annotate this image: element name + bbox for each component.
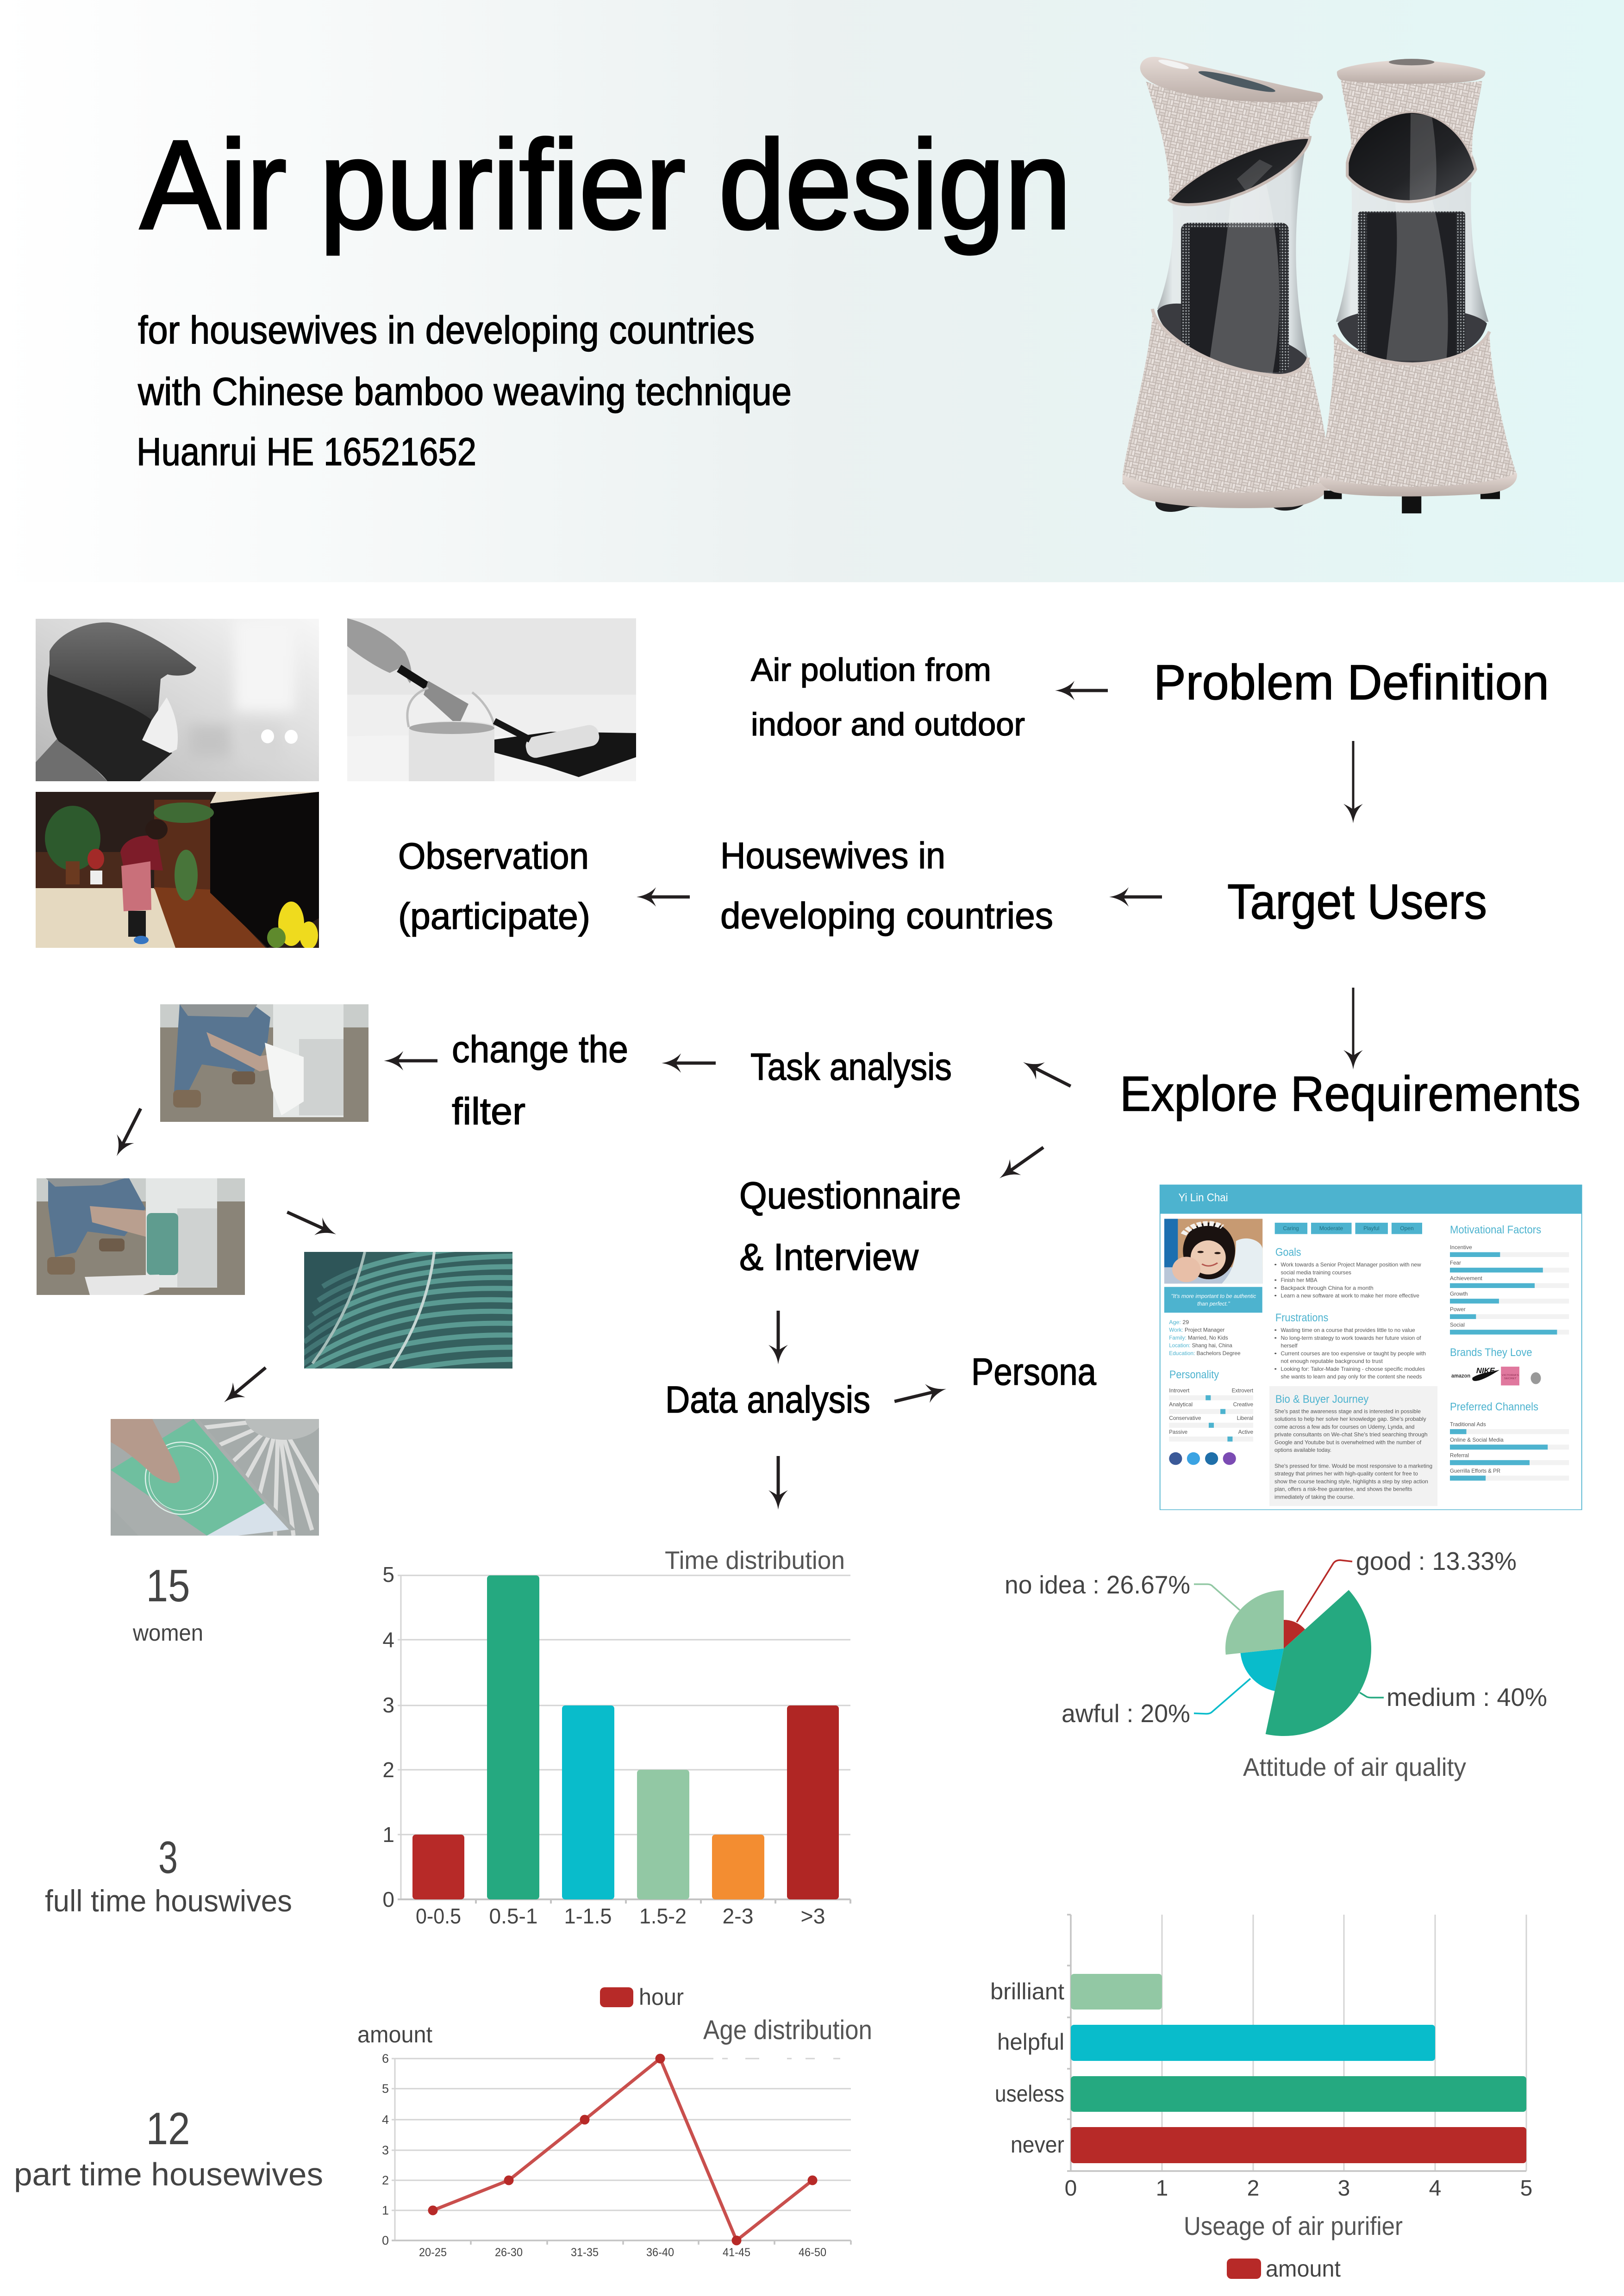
y axis labels: 0 [382,2234,389,2247]
chart title: Time distribution [665,1546,845,1574]
line chart: age distribution [357,1984,872,2259]
sector labels: medium : 40% [1387,1683,1547,1711]
x axis labels [416,1904,825,1928]
persona motivational factors [1450,1223,1569,1335]
y axis labels: 6 [382,2052,389,2066]
persona quote: than perfect." [1197,1300,1230,1307]
process text: target users: Target Users [1227,874,1487,929]
chart title: Useage of air purifier [1184,2211,1403,2240]
x axis labels: >3 [801,1904,825,1928]
value axis labels: 5 [1520,2176,1532,2201]
persona frustrations: Frustrations [1275,1312,1328,1324]
persona goals: • [1274,1285,1277,1291]
y axis labels: 3 [382,1693,394,1717]
persona personality sliders: Analytical [1169,1401,1193,1408]
arrow: housewives to observation [637,887,690,907]
persona trait tags: Open [1400,1226,1414,1232]
value axis labels: 4 [1429,2176,1441,2201]
persona bio panel: Bio & Buyer Journey [1275,1393,1369,1405]
persona demographics: Age: 29 [1169,1319,1189,1325]
persona demographics [1169,1319,1241,1356]
process text: air pollution: Air polution from [751,652,991,688]
arrow: problem to target users [1343,741,1363,823]
persona frustrations: she wants to learn and pay only for the content she needs [1281,1374,1422,1380]
persona goals: • [1274,1277,1277,1283]
y axis labels: 2 [382,1758,394,1782]
persona bio panel: strategy that primes her with high-quality content for free to [1274,1471,1418,1477]
persona frustrations: • [1274,1366,1277,1372]
photo: painting with brush and can [347,618,636,781]
left purifier [1123,57,1332,512]
horizontal bar chart: usage of air purifier [990,1915,1532,2282]
persona personality sliders [1169,1368,1253,1442]
x axis labels: 0-0.5 [416,1904,461,1928]
persona bio panel: She's past the awareness stage and is interested in possible [1274,1408,1421,1415]
persona brands: Brands They Love [1450,1346,1532,1358]
photo: filter close-up [276,1245,522,1423]
y axis labels: 5 [382,2082,389,2096]
subtitle text block [137,308,792,473]
value axis labels [1065,2176,1532,2201]
x axis labels: 1-1.5 [564,1904,612,1928]
process text: task analysis: Task analysis [750,1046,952,1088]
persona motivational factors: Social [1450,1322,1465,1328]
persona brands [1450,1346,1541,1385]
x axis labels: 2-3 [722,1904,754,1928]
process text: data analysis: Data analysis [665,1379,870,1421]
persona personality sliders: Personality [1169,1368,1219,1381]
persona bio panel: Google and Youtube but is overwhelmed with the number of [1274,1439,1421,1446]
arrow: photo step 2 to 3 [283,1203,340,1243]
persona frustrations: • [1274,1350,1277,1357]
persona goals: Backpack through China for a month [1281,1285,1374,1291]
x axis labels: 26-30 [495,2246,523,2259]
x axis labels: 46-50 [799,2246,826,2259]
arrow: photo step 3 to 4 [218,1360,272,1410]
persona trait tags: Playful [1363,1226,1380,1232]
rose chart: attitude of air quality [1005,1547,1547,1781]
persona motivational factors: Achievement [1450,1276,1482,1282]
stat: 3 full time housewives: 3 [158,1832,178,1883]
persona quote: "It's more important to be authentic [1171,1293,1256,1300]
photo: woman cleaning at home [36,792,319,949]
persona goals: Goals [1275,1246,1301,1258]
process text: observation: Observation [398,835,589,877]
y axis labels: 1 [382,2203,389,2217]
arrow: questionnaire to data analysis [768,1311,788,1364]
sector labels: awful : 20% [1062,1699,1190,1728]
persona frustrations: Wasting time on a course that provides little to no value [1281,1327,1415,1333]
persona photo [1164,1219,1262,1284]
persona frustrations: not enough reputable background to trust [1281,1358,1383,1364]
process text: housewives [720,835,1053,936]
y axis labels: 5 [382,1562,394,1587]
process text: questionnaire and interview: Questionnaire [739,1175,961,1217]
arrow: target users to explore requirements [1343,988,1363,1070]
stat: 15 women [132,1560,203,1646]
persona motivational factors: Fear [1450,1260,1461,1266]
persona personality sliders: Passive [1169,1429,1187,1435]
persona brands: SECRET [1504,1377,1517,1380]
value axis labels: 2 [1247,2176,1259,2201]
hero banner [0,0,1624,582]
persona goals: Work towards a Senior Project Manager position with new [1281,1262,1421,1268]
photo: opening purifier panel [160,1004,369,1122]
persona preferred channels: Guerrilla Efforts & PR [1450,1468,1500,1474]
persona goals [1274,1246,1421,1299]
x axis labels [419,2246,826,2259]
persona bio panel: options available today. [1274,1447,1331,1453]
persona personality sliders: Active [1238,1429,1253,1435]
persona bio panel: immediately of taking the course. [1274,1494,1355,1500]
photo: person in hood wearing mask [36,619,319,781]
leader lines [1194,1560,1384,1714]
photo: phone app over purifier [111,1394,324,1536]
x axis labels: 36-40 [646,2246,674,2259]
category labels: brilliant [990,1979,1064,2004]
persona motivational factors: Power [1450,1307,1466,1313]
process text: questionnaire and interview: & Interview [739,1236,919,1278]
persona preferred channels: Preferred Channels [1450,1400,1538,1412]
category labels: never [1011,2132,1064,2158]
persona goals: • [1274,1293,1277,1299]
persona bio panel: come across a few ads for courses on Udemy, Lynda, and [1274,1424,1414,1430]
stat: 3 full time housewives: full time houswives [45,1884,292,1918]
stat: 12 part time housewives: 12 [146,2103,190,2154]
persona bio panel [1269,1386,1437,1506]
stat: 15 women: women [132,1620,203,1646]
value axis labels: 1 [1156,2176,1168,2201]
chart title: Age distribution [703,2015,872,2045]
sector labels [1005,1547,1547,1728]
arrow: data analysis to charts [768,1456,788,1510]
persona demographics: Family: Married, No Kids [1169,1335,1228,1341]
stat: 12 part time housewives: part time housewives [14,2156,323,2192]
process text: observation [398,835,590,937]
bar chart: time distribution [382,1546,850,1928]
persona brands: VICTORIA'S [1502,1374,1519,1377]
value axis labels: 0 [1065,2176,1077,2201]
legend: amount [1266,2256,1341,2282]
persona frustrations: • [1274,1327,1277,1333]
right purifier [1319,59,1517,513]
persona goals: Finish her MBA [1281,1277,1318,1283]
x axis labels: 31-35 [571,2246,599,2259]
subtitle text block: Huanrui HE 16521652 [137,430,476,473]
subtitle text block: for housewives in developing countries [138,308,755,352]
persona motivational factors: Motivational Factors [1450,1223,1541,1236]
process text: observation: (participate) [398,896,590,937]
persona demographics: Location: Shang hai, China [1169,1343,1232,1349]
persona demographics: Education: Bachelors Degree [1169,1350,1241,1356]
x axis labels: 0.5-1 [489,1904,538,1928]
process text: change the filter: filter [452,1090,525,1132]
arrow: target users to housewives [1109,887,1162,907]
y axis labels: 4 [382,1628,394,1652]
arrow: explore to questionnaire [994,1139,1049,1186]
process text: change the filter [452,1028,628,1132]
sector labels: good : 13.33% [1356,1547,1517,1575]
persona bio panel: private consultants on We-chat She's tried searching through [1274,1431,1428,1438]
persona personality sliders: Liberal [1237,1415,1253,1422]
persona bio panel: plan, offers a risk-free guarantee, and shows the benefits [1274,1486,1412,1493]
legend: hour [639,1984,684,2010]
bars [1071,1974,1526,2163]
persona motivational factors: Growth [1450,1291,1468,1297]
y axis labels: 4 [382,2113,389,2127]
process text: change the filter: change the [452,1028,628,1070]
x axis labels: 1.5-2 [639,1904,687,1928]
arrow: photo step 1 to 2 [108,1104,150,1160]
persona brands: amazon [1451,1373,1470,1379]
persona preferred channels: Online & Social Media [1450,1437,1504,1443]
sectors [1225,1590,1371,1736]
persona frustrations: Current courses are too expensive or taught by people with [1281,1350,1426,1357]
data line [428,2054,818,2246]
persona frustrations: • [1274,1335,1277,1341]
title: Air purifier design [140,114,1071,255]
persona bio panel: She's pressed for time. Would be most responsive to a marketing [1274,1463,1432,1469]
photo: replacing green filter [37,1178,245,1295]
stat: 12 part time housewives [14,2103,323,2192]
process text: air pollution: indoor and outdoor [751,706,1025,742]
persona personality sliders: Creative [1233,1401,1253,1408]
persona brands: NIKE [1476,1366,1495,1375]
persona frustrations: No long-term strategy to work towards her future vision of [1281,1335,1421,1341]
persona personality sliders: Conservative [1169,1415,1201,1422]
persona frustrations: herself [1281,1343,1298,1349]
persona quote [1164,1287,1262,1313]
persona preferred channels: Referral [1450,1452,1469,1459]
y axis labels [382,2052,389,2247]
persona frustrations [1274,1312,1426,1380]
arrow: explore to task analysis [1019,1053,1075,1095]
chart title: Attitude of air quality [1243,1753,1466,1781]
arrow: problem to pollution [1055,681,1108,700]
arrow: change filter to photo [384,1051,437,1070]
panel: persona card [1160,1185,1582,1510]
y axis labels: 2 [382,2173,389,2187]
persona personality sliders: Extrovert [1232,1388,1253,1394]
y axis labels: 0 [382,1887,394,1911]
category labels [990,1979,1064,2158]
process text: air pollution [751,652,1025,742]
persona preferred channels [1450,1400,1569,1481]
process text: persona: Persona [971,1351,1096,1393]
y axis labels: 1 [382,1823,394,1847]
persona goals: Learn a new software at work to make her more effective [1281,1293,1419,1299]
value axis labels: 3 [1338,2176,1350,2201]
persona social icons [1169,1452,1236,1465]
process text: explore requirements: Explore Requirements [1120,1066,1580,1121]
persona trait tags [1275,1223,1422,1234]
arrow: data analysis to persona [892,1380,949,1411]
persona bio panel: solutions to help her solve her knowledge gap. She's probably [1274,1416,1426,1422]
arrow: task analysis to change filter [662,1053,716,1073]
sector labels: no idea : 26.67% [1005,1570,1190,1599]
persona header [1160,1185,1582,1214]
persona goals: • [1274,1262,1277,1268]
persona personality sliders: Introvert [1169,1388,1189,1394]
x axis labels: 41-45 [723,2246,750,2259]
persona trait tags: Caring [1283,1226,1299,1232]
category labels: useless [995,2081,1064,2107]
persona trait tags: Moderate [1319,1226,1343,1232]
x axis labels: 20-25 [419,2246,447,2259]
y axis labels: 3 [382,2143,389,2157]
category labels: helpful [997,2029,1064,2055]
persona header: Yi Lin Chai [1179,1191,1228,1204]
process text: housewives: developing countries [720,895,1053,936]
persona motivational factors: Incentive [1450,1244,1472,1251]
persona bio panel: show the course teaching style, highlights a step by step action [1274,1479,1428,1485]
axis name: amount [357,2022,432,2047]
process text: problem definition: Problem Definition [1154,654,1549,710]
stat: 15 women: 15 [146,1560,190,1611]
persona preferred channels: Traditional Ads [1450,1421,1486,1428]
persona demographics: Work: Project Manager [1169,1327,1225,1333]
legend [600,1984,684,2010]
legend [1227,2256,1341,2282]
stat: 3 full time housewives [45,1832,292,1918]
process text: housewives: Housewives in [720,835,945,876]
product illustration: two air purifiers [1123,57,1517,513]
persona frustrations: Looking for: Tailor-Made Training - choose specific modules [1281,1366,1425,1372]
process text: questionnaire and interview [739,1175,961,1278]
persona goals: social media training courses [1281,1269,1351,1276]
bars [412,1575,839,1899]
subtitle text block: with Chinese bamboo weaving technique [137,370,792,413]
y axis labels [382,1562,394,1911]
